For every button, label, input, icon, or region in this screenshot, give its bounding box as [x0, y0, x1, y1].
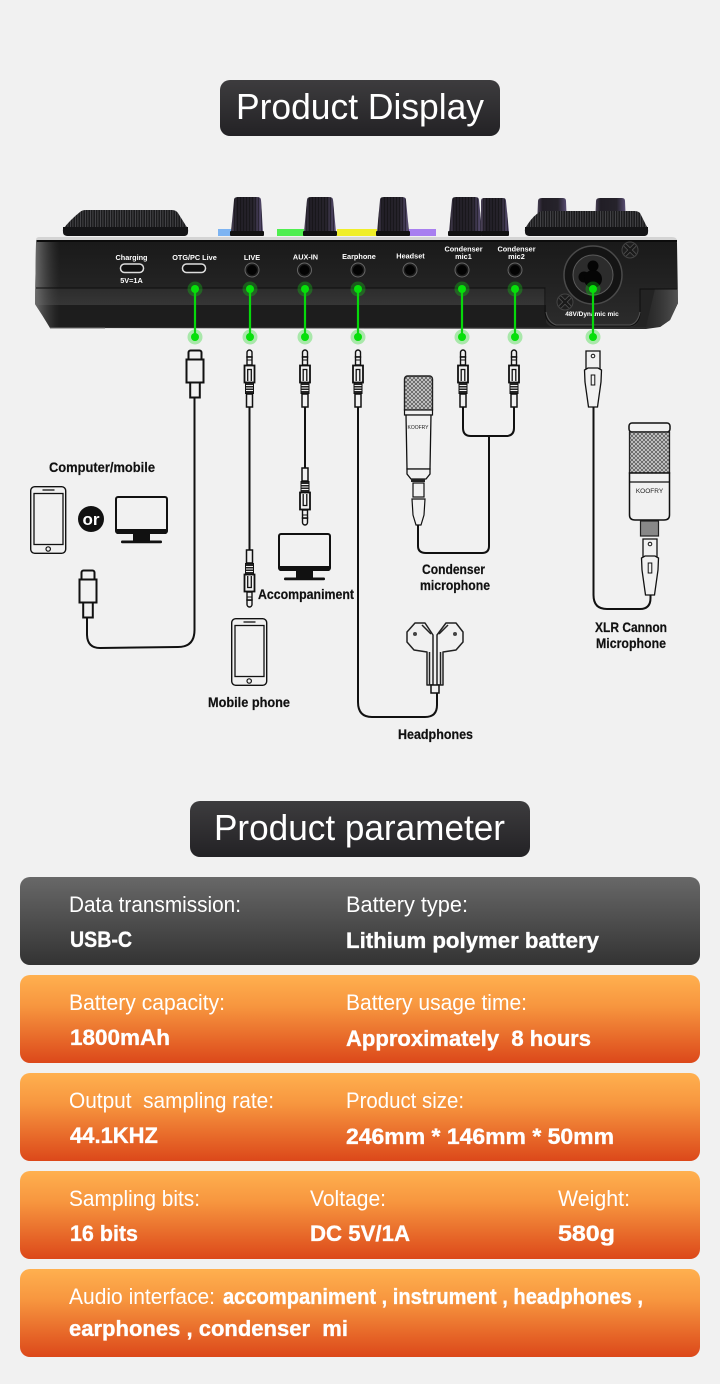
- cable: USB-C to computer or mobile: [80, 350, 204, 648]
- icon: monitor: [116, 497, 167, 543]
- Battery capacity: [69, 990, 225, 1050]
- Output sampling rate: Output sampling rate:: [69, 1088, 274, 1113]
- parameter row 3: [20, 1073, 700, 1161]
- label: Condenser microphone: microphone: [420, 577, 490, 593]
- rear knobs: [537, 198, 626, 225]
- cable: Condenser mic ports to condenser microphone: [418, 350, 519, 553]
- Voltage: DC 5V/1A: [310, 1221, 410, 1246]
- chassis: [35, 237, 678, 329]
- icon: microphone: [404, 376, 432, 525]
- cable: Earphone to headphones: [353, 350, 437, 717]
- headphones: [398, 623, 473, 742]
- condenser microphone: [404, 376, 490, 593]
- port labels: LIVE: [244, 253, 260, 262]
- icon: phone: [232, 619, 267, 685]
- XLR Cannon microphone: [595, 423, 670, 651]
- Product size: [346, 1088, 614, 1149]
- Sampling bits: Sampling bits:: [69, 1186, 200, 1211]
- Product size: Product size:: [346, 1088, 464, 1113]
- icon: or badge: or: [82, 510, 100, 529]
- Weight: 580g: [558, 1221, 615, 1246]
- icon: microphone: [629, 423, 670, 595]
- Battery capacity: 1800mAh: [70, 1025, 170, 1050]
- Product size: 246mm * 146mm * 50mm: [346, 1124, 614, 1149]
- label: Mobile phone: Mobile phone: [208, 694, 290, 710]
- Data transmission: [69, 892, 241, 952]
- XLR combo socket: [557, 242, 638, 310]
- Sampling bits: [69, 1186, 200, 1246]
- title: Product parameter: [190, 801, 530, 857]
- colored pads: [218, 229, 436, 236]
- Weight: [558, 1186, 630, 1246]
- Audio interface: accompaniment , instrument , headphones ,: [223, 1284, 643, 1309]
- Output sampling rate: 44.1KHZ: [70, 1123, 158, 1148]
- label: XLR Cannon Microphone: XLR Cannon: [595, 619, 667, 635]
- audio jacks: [245, 263, 522, 277]
- Audio interface: earphones , condenser mi: [69, 1316, 348, 1341]
- computer or mobile group: [31, 459, 167, 553]
- title: Product parameter: Product parameter: [214, 807, 505, 848]
- label: Computer/mobile: Computer/mobile: [49, 459, 155, 475]
- cable: LIVE to mobile phone: [244, 350, 254, 607]
- Battery type: [346, 892, 599, 953]
- accompaniment: [258, 534, 354, 602]
- Battery usage time: Approximately 8 hours: [346, 1026, 591, 1051]
- title: Product Display: Product Display: [236, 86, 484, 127]
- port labels: Earphone: [342, 252, 376, 261]
- icon: earbuds: [407, 623, 463, 693]
- device: audio mixer back panel: [35, 197, 678, 329]
- label: Condenser microphone: [420, 561, 490, 593]
- port labels: mic2: [508, 252, 525, 261]
- audio jack holes: [247, 265, 520, 275]
- Data transmission: USB-C: [70, 927, 132, 952]
- front knobs: [230, 197, 509, 236]
- label: Headphones: Headphones: [398, 726, 473, 742]
- port labels: Charging: [115, 253, 148, 262]
- Audio interface: Audio interface:: [69, 1284, 215, 1309]
- Sampling bits: 16 bits: [70, 1221, 138, 1246]
- mobile phone: [208, 619, 290, 710]
- Battery usage time: Battery usage time:: [346, 990, 527, 1015]
- label: Accompaniment: Accompaniment: [258, 586, 354, 602]
- Battery usage time: [346, 990, 591, 1051]
- cable: XLR port to XLR microphone: [584, 351, 650, 609]
- port labels: AUX-IN: [293, 252, 318, 262]
- parameter row 4: [20, 1171, 700, 1259]
- port labels: OTG/PC Live: [172, 253, 217, 262]
- Data transmission: Data transmission:: [69, 892, 241, 917]
- Audio interface: [69, 1284, 643, 1341]
- cable: AUX-IN to accompaniment: [300, 350, 310, 525]
- left dial: [63, 210, 188, 236]
- icon: phone: [31, 487, 66, 553]
- port labels: Headset: [396, 252, 425, 260]
- label: XLR Cannon Microphone: Microphone: [596, 635, 666, 651]
- port labels: [115, 244, 619, 318]
- USB-C ports: [120, 264, 206, 272]
- label: Condenser microphone: Condenser: [422, 561, 485, 577]
- Battery type: Lithium polymer battery: [346, 928, 599, 953]
- icon: monitor: [279, 534, 330, 580]
- Battery type: Battery type:: [346, 892, 468, 917]
- parameter row 1: [20, 877, 700, 965]
- Voltage: [310, 1186, 410, 1246]
- icon: microphone: KOOFRY: [636, 488, 664, 495]
- port labels: Condenser: [497, 244, 536, 254]
- Weight: Weight:: [558, 1186, 630, 1211]
- port labels: 48V/Dynamic mic: [565, 311, 619, 318]
- Output sampling rate: [69, 1088, 274, 1148]
- port labels: Condenser: [444, 244, 483, 254]
- icon: microphone: KOOFRY: [407, 425, 429, 431]
- Battery capacity: Battery capacity:: [69, 990, 225, 1015]
- parameter row 5: [20, 1269, 700, 1357]
- label: XLR Cannon Microphone: [595, 619, 667, 651]
- right dial: [525, 211, 648, 236]
- parameter row 2: [20, 975, 700, 1063]
- port labels: mic1: [455, 252, 472, 261]
- title: Product Display: [220, 80, 500, 136]
- port labels: 5V=1A: [120, 276, 143, 285]
- green connection markers: [188, 282, 600, 344]
- Voltage: Voltage:: [310, 1186, 386, 1211]
